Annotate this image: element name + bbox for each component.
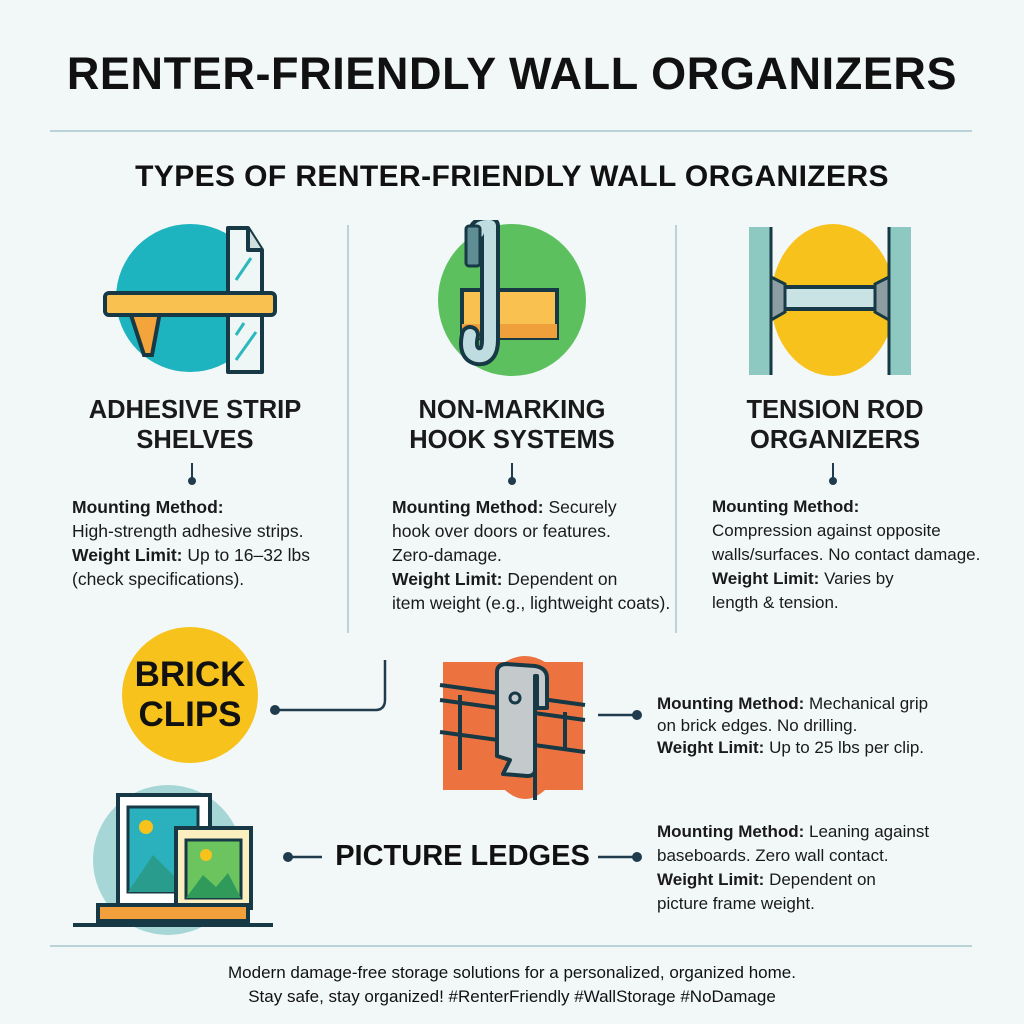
heading: adhesive: ADHESIVE STRIP (89, 396, 301, 424)
text: picture ledges (657, 822, 929, 913)
text: picture ledges: baseboards. Zero wall contact. (657, 846, 889, 865)
text: tension (712, 497, 980, 612)
text: tension: Weight Limit: Varies by (712, 569, 894, 588)
brick clips badge: BRICK (135, 655, 245, 694)
footer: Modern damage-free storage solutions for a personalized, organized home. (228, 963, 796, 982)
text: hooks: hook over doors or features. (392, 521, 611, 541)
heading: tension: ORGANIZERS (750, 426, 920, 454)
icon: hook (438, 220, 586, 376)
text: adhesive: High-strength adhesive strips. (72, 521, 304, 541)
text: brick clips: Weight Limit: Up to 25 lbs per clip. (657, 738, 924, 757)
text: hooks (392, 497, 670, 613)
text: picture ledges: picture frame weight. (657, 894, 815, 913)
heading: adhesive: SHELVES (136, 426, 254, 454)
text: hooks: Weight Limit: Dependent on (392, 569, 617, 589)
text: adhesive: (check specifications). (72, 569, 244, 589)
icon: tension rod (749, 224, 911, 376)
heading: adhesive (89, 396, 301, 454)
text: hooks: item weight (e.g., lightweight coats). (392, 593, 670, 613)
footer: Stay safe, stay organized! #RenterFriendly #WallStorage #NoDamage (248, 987, 776, 1006)
text: tension: walls/surfaces. No contact damage. (712, 545, 980, 564)
heading: tension: TENSION ROD (746, 396, 924, 424)
brick clips badge (122, 627, 258, 763)
text: brick clips (657, 694, 928, 757)
heading: picture ledges: PICTURE LEDGES (335, 840, 590, 872)
footer (228, 963, 796, 1006)
text: hooks: Zero-damage. (392, 545, 502, 565)
subtitle: TYPES OF RENTER-FRIENDLY WALL ORGANIZERS (135, 160, 889, 193)
text: picture ledges: Mounting Method: Leaning against (657, 822, 929, 841)
text: tension: Compression against opposite (712, 521, 941, 540)
title: RENTER-FRIENDLY WALL ORGANIZERS (67, 48, 957, 99)
text: adhesive (72, 497, 310, 589)
text: adhesive: Mounting Method: (72, 497, 224, 517)
text: picture ledges: Weight Limit: Dependent on (657, 870, 876, 889)
text: brick clips: on brick edges. No drilling. (657, 716, 857, 735)
heading: hooks: HOOK SYSTEMS (409, 426, 615, 454)
text: hooks: Mounting Method: Securely (392, 497, 617, 517)
brick clips badge: CLIPS (138, 695, 242, 734)
text: tension: Mounting Method: (712, 497, 859, 516)
icon: picture ledge (73, 785, 273, 935)
connector (270, 660, 386, 715)
heading: hooks (409, 396, 615, 454)
heading: hooks: NON-MARKING (418, 396, 605, 424)
text: adhesive: Weight Limit: Up to 16–32 lbs (72, 545, 310, 565)
icon: brick clip (440, 656, 586, 800)
heading: tension (746, 396, 924, 454)
text: brick clips: Mounting Method: Mechanical grip (657, 694, 928, 713)
text: tension: length & tension. (712, 593, 839, 612)
icon: adhesive strip shelf (103, 224, 277, 374)
